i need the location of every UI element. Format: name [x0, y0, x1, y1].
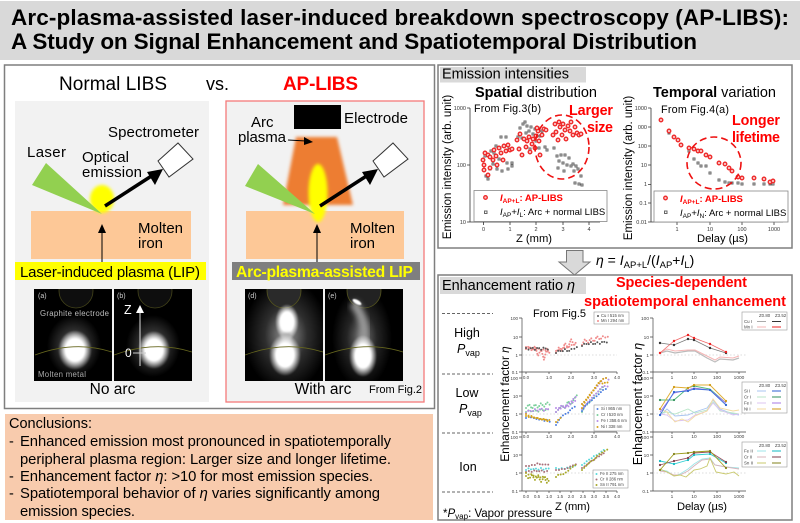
- plasma glow: [308, 164, 328, 222]
- label: arc plasma: plasma: [238, 129, 287, 146]
- label: arc plasma: Arc: [251, 114, 274, 131]
- legend: panel c: Sn II 791 nm: [600, 482, 624, 487]
- legend: panel a: [594, 312, 629, 324]
- chart: delay dependence: 100: [641, 376, 649, 382]
- chart: Z dependence: Enhancement factor η: [498, 346, 512, 462]
- photo: a: Graphite electrode: [40, 309, 109, 318]
- heading: species-dependent: spatiotemporal enhancement: [584, 294, 786, 310]
- chart: temporal variation: [623, 85, 788, 245]
- legend: panel f: Sn II: [744, 460, 753, 466]
- chart: delay dependence: 100: [713, 375, 721, 381]
- chart: Z dependence: 10: [513, 394, 518, 399]
- source note: From Fig.2: [369, 384, 422, 396]
- panel: conclusions: -: [9, 486, 14, 502]
- chart: spatial distribution: 1: [508, 227, 512, 233]
- legend: panel b: Fe I 358.6 nm: [601, 418, 627, 423]
- chart: Z dependence: 1: [515, 412, 518, 417]
- scatter: AP-LIBS: [481, 120, 583, 177]
- label: laser-induced plasma: Laser-induced plasma (LIP): [20, 264, 200, 281]
- footnote: *P: [443, 508, 455, 520]
- legend: AP: [683, 213, 691, 220]
- heading: AP-LIBS: AP-LIBS: [283, 74, 358, 95]
- icon: spectrometer: [158, 143, 193, 177]
- lines: panel f: [660, 451, 739, 477]
- chart: Z dependence: 1: [515, 471, 518, 476]
- chart: temporal variation: Delay (µs): [697, 233, 748, 245]
- legend: panel a: Mn I 294 nm: [601, 318, 625, 323]
- label: optical emission: emission: [82, 164, 142, 181]
- label: arc-plasma-assisted LIP: Arc-plasma-assisted LIP: [236, 264, 413, 281]
- legend: : Arc + normal LIBS: [704, 208, 786, 219]
- plasma glow: [90, 185, 114, 213]
- chart: Z dependence: 100: [510, 316, 518, 321]
- chart: delay dependence: 1: [646, 353, 649, 359]
- panel: LIBS comparison: [4, 65, 434, 408]
- photo: a: [34, 289, 112, 381]
- formula: η = I: [596, 252, 624, 268]
- chart: delay dependence: 100: [641, 316, 649, 322]
- chart: temporal variation: 1000: [768, 227, 780, 233]
- legend: panel f: Z0.80: [759, 443, 771, 448]
- chart: Z dependence: 0.0: [523, 434, 530, 439]
- chart: delay dependence: 1000: [734, 434, 745, 440]
- legend: [474, 190, 607, 222]
- chart: Z dependence: 0.1: [512, 430, 518, 435]
- chart: Z dependence: 0.1: [512, 489, 518, 494]
- chart: Z dependence: 2.0: [568, 434, 575, 439]
- chart: temporal variation: 1000: [635, 106, 647, 112]
- chart: Z dependence: 1.5: [557, 494, 564, 499]
- chart: temporal variation: Temporal variation: [653, 85, 776, 101]
- caption: with arc: With arc: [295, 381, 352, 398]
- arrow: optical emission: [105, 169, 163, 206]
- photo: d: (d): [248, 293, 257, 300]
- legend: I: [697, 208, 700, 219]
- legend: AP: [503, 212, 511, 219]
- chart: delay dependence: Delay (µs): [677, 501, 727, 513]
- footnote: : Vapor pressure: [468, 508, 552, 520]
- scatter: panel a: [526, 336, 609, 360]
- heading: vs.: vs.: [206, 74, 229, 94]
- scatter: arc + normal LIBS: [484, 121, 583, 186]
- photo: b: Z: [124, 303, 132, 317]
- panel: enhancement ratio: [438, 275, 792, 521]
- legend: panel e: Z3.52: [775, 383, 787, 388]
- chart: spatial distribution: 10: [460, 220, 466, 226]
- molten iron: [31, 211, 191, 259]
- callout: longer lifetime: [687, 113, 780, 189]
- panel: conclusions: [5, 414, 433, 520]
- chart: delay dependence: 10: [644, 335, 649, 341]
- chart: Z dependence: 4.0: [614, 434, 621, 439]
- chart: spatial distribution: Spatial distribution: [475, 85, 597, 101]
- formula: L: [684, 260, 690, 271]
- footnote: vap: [455, 512, 469, 521]
- panel: conclusions: -: [9, 469, 14, 485]
- legend: panel e: Fe I: [744, 400, 752, 406]
- row labels: vap: [467, 408, 482, 418]
- chart: temporal variation: 100: [638, 144, 647, 150]
- chart: Z dependence: 2.5: [580, 494, 587, 499]
- chart: spatial distribution: 2: [534, 227, 538, 233]
- chart: Z dependence: 0.0: [523, 375, 530, 380]
- chart: delay dependence: 1: [671, 494, 674, 500]
- legend: N: [700, 213, 705, 220]
- callout: larger size: size: [587, 120, 613, 136]
- chart: Z dependence: 3.0: [591, 375, 598, 380]
- chart: Z dependence: From Fig.5: [533, 308, 586, 320]
- chart: Z dependence: 4.0: [614, 494, 621, 499]
- chart: Z dependence: 2.0: [568, 494, 575, 499]
- heading: species-dependent: Species-dependent: [616, 275, 747, 291]
- legend: panel e: Z0.80: [759, 383, 771, 388]
- chart: delay dependence: 0.1: [642, 370, 649, 376]
- chart: delay dependence: 1000: [734, 375, 745, 381]
- label: optical emission: Optical: [82, 149, 129, 166]
- legend: L: [520, 212, 524, 219]
- chart: delay dependence: 1: [646, 471, 649, 477]
- legend: I: [517, 207, 520, 218]
- chart: Z dependence: 2.0: [568, 375, 575, 380]
- legend: panel c: Cr II 286 nm: [600, 476, 624, 482]
- legend: panel b: Si I 865 nm: [601, 406, 623, 411]
- legend: panel f: [742, 442, 787, 467]
- legend: AP+L: [683, 199, 699, 206]
- row labels: Ion: [459, 460, 477, 474]
- scatter: arc + normal LIBS: [668, 132, 774, 185]
- legend: AP+L: [503, 198, 519, 205]
- row labels: P: [459, 402, 468, 416]
- scatter: panel c: [526, 449, 609, 483]
- legend: panel e: Cr I: [744, 394, 751, 400]
- legend: [654, 191, 788, 222]
- lines: panel e: [660, 385, 739, 422]
- formula: I: [680, 252, 684, 268]
- chart: delay dependence: 1: [671, 434, 674, 440]
- legend: +: [511, 207, 517, 218]
- legend: panel b: Ni I 338 nm: [601, 424, 623, 429]
- arc plasma: [283, 137, 353, 205]
- chart: delay dependence: 0.1: [642, 489, 649, 495]
- photo: d: [245, 289, 323, 381]
- photo: b: (b): [117, 293, 126, 300]
- panel: conclusions: -: [9, 434, 14, 450]
- panel: conclusions: Enhanced emission most pronounced in spatiotemporally: [20, 434, 392, 450]
- legend: panel a: Cu I 515 nm: [601, 313, 624, 318]
- icon: laser beam: [32, 163, 102, 214]
- chart: delay dependence: 1: [646, 412, 649, 418]
- icon: spectrometer: [373, 143, 408, 177]
- legend: panel d: [742, 312, 787, 330]
- chart: delay dependence: 100: [713, 434, 721, 440]
- chart: spatial distribution: [442, 85, 613, 245]
- chart: Z dependence: 0.1: [512, 370, 518, 375]
- legend: panel c: [593, 470, 628, 488]
- chart: Z dependence: 1.0: [546, 434, 553, 439]
- legend: +: [691, 208, 697, 219]
- formula: AP+L: [624, 260, 647, 271]
- chart: Z dependence: 1.0: [546, 494, 553, 499]
- chart: spatial distribution: 4: [587, 227, 591, 233]
- chart: spatial distribution: Emission intensity (arb. unit): [442, 95, 454, 239]
- panel: conclusions: Enhancement factor η: >10 for most emission species.: [20, 469, 373, 485]
- chart: spatial distribution: Z (mm): [516, 233, 552, 245]
- label: electrode: Electrode: [344, 110, 408, 127]
- legend: I: [500, 207, 503, 218]
- label: molten iron: iron: [138, 235, 163, 252]
- legend: panel f: Cr II: [744, 454, 752, 460]
- chart: temporal variation: 1: [675, 227, 679, 233]
- chart: Z dependence: Z (mm): [555, 501, 590, 513]
- arrow: optical emission: [320, 169, 378, 206]
- label: laser: Laser: [27, 144, 66, 161]
- chart: delay dependence: 1: [671, 375, 674, 381]
- legend: I: [500, 193, 503, 204]
- row labels: vap: [465, 348, 480, 358]
- chart: temporal variation: 0.1: [639, 201, 647, 207]
- chart: Z dependence: 10: [513, 335, 518, 340]
- scatter: panel b: [526, 378, 609, 425]
- chart: spatial distribution: From Fig.3(b): [474, 103, 541, 115]
- photo: a: (a): [38, 293, 47, 300]
- chart: temporal variation: 0.01: [636, 220, 647, 226]
- chart: Z dependence: 1.0: [546, 375, 553, 380]
- row labels: High: [454, 326, 480, 340]
- scatter: AP-LIBS: [659, 118, 775, 184]
- arrow: down: [559, 250, 590, 275]
- legend: panel d: Mn I: [744, 324, 753, 330]
- row labels: P: [457, 342, 466, 356]
- chart: delay dependence: 10: [691, 375, 697, 381]
- legend: panel f: Z3.52: [775, 443, 787, 448]
- chart: temporal variation: Emission intensity (arb. unit): [623, 96, 635, 240]
- legend: : Arc + normal LIBS: [523, 207, 605, 218]
- chart: temporal variation: 1: [644, 182, 647, 188]
- chart: spatial distribution: 1000: [454, 106, 466, 112]
- chart: Z dependence: 10: [513, 453, 518, 458]
- row labels: Low: [456, 386, 479, 400]
- legend: panel b: [594, 405, 630, 431]
- formula: ): [690, 252, 694, 268]
- photo: b: 0: [125, 346, 132, 360]
- chart: Z dependence: 100: [510, 376, 518, 381]
- icon: electrode: [294, 105, 341, 129]
- callout: larger size: [535, 103, 613, 179]
- heading: enhancement ratio: Enhancement ratio η: [442, 278, 575, 294]
- chart: temporal variation: 100: [737, 227, 747, 233]
- photo: e: [325, 289, 403, 381]
- row labels: [442, 314, 493, 492]
- callout: longer lifetime: Longer: [732, 113, 780, 129]
- legend: panel e: Si I: [744, 388, 750, 394]
- callout: longer lifetime: lifetime: [732, 130, 780, 146]
- chart: temporal variation: From Fig.4(a): [661, 104, 729, 116]
- label: molten iron: Molten: [350, 220, 395, 237]
- panel: AP-LIBS schematic: [226, 101, 424, 402]
- legend: panel e: [742, 382, 787, 413]
- legend: : AP-LIBS: [519, 193, 563, 204]
- legend: panel d: Z3.52: [775, 313, 787, 318]
- photo: b: [114, 289, 192, 381]
- chart: delay dependence: 10: [644, 394, 649, 400]
- chart: delay dependence: 10: [691, 494, 697, 500]
- heading: emission intensities: Emission intensities: [442, 66, 569, 82]
- formula: +: [672, 252, 680, 268]
- chart: Z dependence: 3.0: [591, 494, 598, 499]
- molten iron: [246, 211, 404, 259]
- legend: panel f: Fe II: [744, 448, 753, 454]
- chart: Z dependence: [498, 308, 630, 513]
- chart: delay dependence: [631, 312, 787, 513]
- chart: Z dependence: 1: [515, 353, 518, 358]
- chart: temporal variation: 10: [641, 163, 647, 169]
- panel: conclusions: emission species.: [20, 504, 135, 520]
- caption: no arc: No arc: [90, 381, 136, 398]
- label: molten iron: iron: [350, 235, 375, 252]
- legend: panel b: Cr I 520 nm: [601, 412, 623, 417]
- lines: panel d: [660, 335, 739, 362]
- legend: : AP-LIBS: [699, 194, 743, 205]
- panel: conclusions: Spatiotemporal behavior of η varies significantly among: [20, 486, 380, 502]
- chart: Z dependence: 4.0: [614, 375, 621, 380]
- heading: Normal LIBS: Normal LIBS: [59, 74, 167, 95]
- title: Arc-plasma-assisted laser-induced breakdown spectroscopy (AP-LIBS):: [11, 5, 789, 30]
- chart: delay dependence: 100: [713, 494, 721, 500]
- chart: delay dependence: 10: [644, 453, 649, 459]
- panel: normal LIBS schematic: [15, 101, 209, 402]
- formula: I: [656, 252, 660, 268]
- chart: delay dependence: Enhancement factor η: [631, 343, 645, 465]
- chart: temporal variation: 10: [707, 227, 713, 233]
- chart: Z dependence: 3.5: [603, 494, 610, 499]
- label: spectrometer: Spectrometer: [108, 124, 199, 141]
- formula: AP: [660, 260, 672, 271]
- chart: spatial distribution: 100: [457, 163, 466, 169]
- chart: delay dependence: 1000: [734, 494, 745, 500]
- chart: temporal variation: 000: [638, 125, 647, 131]
- legend: panel e: Ni I: [744, 406, 751, 412]
- legend: I: [680, 208, 683, 219]
- legend: I: [680, 194, 683, 205]
- chart: delay dependence: 10: [691, 434, 697, 440]
- chart: Z dependence: 0.0: [523, 494, 530, 499]
- callout: larger size: Larger: [569, 103, 613, 119]
- chart: delay dependence: 0.1: [642, 430, 649, 436]
- chart: Z dependence: 0.5: [534, 494, 541, 499]
- panel: conclusions: peripheral plasma region: Larger size and longer lifetime.: [20, 452, 391, 468]
- panel: emission intensities: [438, 65, 792, 248]
- arrow: to LIP: [313, 224, 321, 263]
- photo: a: Molten metal: [38, 370, 86, 379]
- photo: e: (e): [328, 293, 337, 300]
- label: molten iron: Molten: [138, 220, 183, 237]
- title: A Study on Signal Enhancement and Spatiotemporal Distribution: [11, 29, 697, 54]
- icon: laser beam: [245, 164, 315, 214]
- legend: panel c: Fe II 275 nm: [600, 471, 624, 476]
- chart: spatial distribution: 3: [561, 227, 565, 233]
- arrow: to arc plasma: [288, 137, 313, 145]
- legend: panel d: Cu I: [744, 319, 752, 324]
- chart: Z dependence: 3.0: [591, 434, 598, 439]
- title: [0, 1, 800, 60]
- panel: conclusions: Conclusions:: [9, 416, 92, 432]
- arrow: to LIP: [98, 224, 106, 263]
- chart: Z dependence: 100: [510, 435, 518, 440]
- formula: /(: [647, 252, 656, 268]
- legend: panel d: Z0.80: [759, 313, 771, 318]
- chart: delay dependence: 100: [641, 435, 649, 441]
- chart: spatial distribution: 0: [482, 227, 485, 233]
